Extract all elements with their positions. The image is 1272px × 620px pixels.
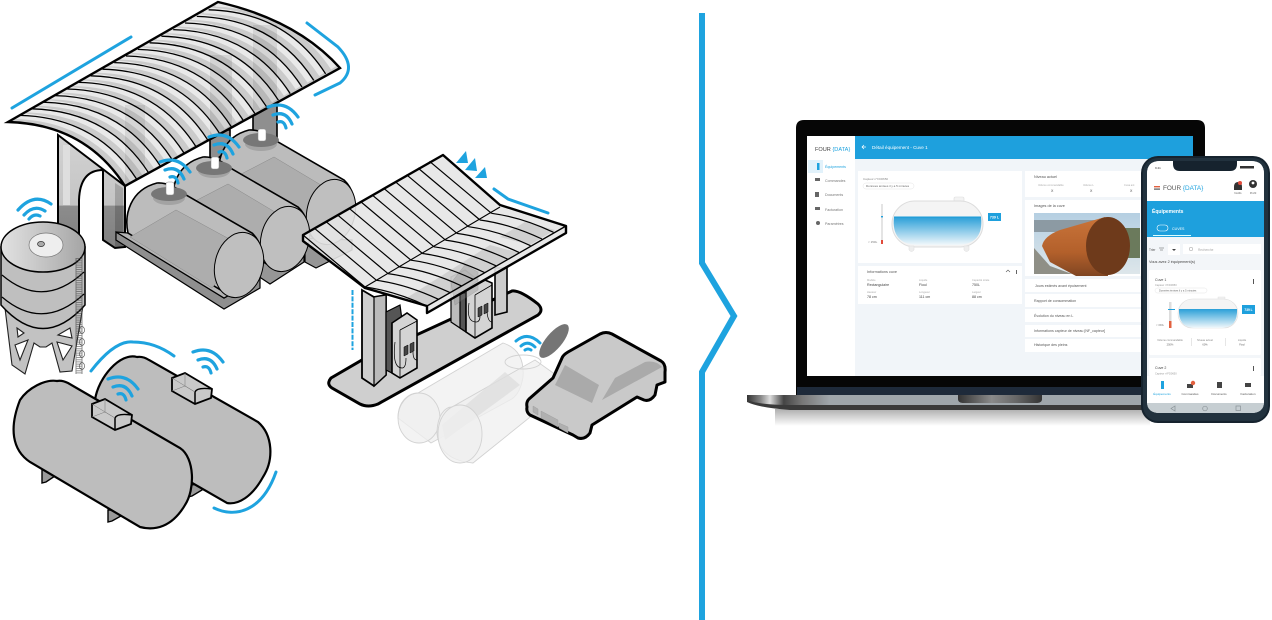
laptop (747, 120, 1206, 426)
equipment card 1: 250% (1167, 342, 1174, 346)
tank info card: 111 cm (919, 295, 930, 299)
car (527, 332, 665, 438)
level label (988, 213, 1001, 221)
equipment card 2 (1149, 358, 1261, 376)
bottom navigation: Équipements (1153, 391, 1171, 396)
tank image card: Images de la cuve (1034, 204, 1065, 208)
tank supports (42, 468, 202, 522)
curved ribbed roof (8, 2, 340, 195)
status bar: 9:41 (1155, 166, 1161, 170)
current level card: Volume commandable (1038, 183, 1064, 187)
blue section header: Équipements (1152, 207, 1184, 215)
blue triangles (456, 151, 487, 178)
phone level label: 739 L (1244, 308, 1253, 312)
equipment card 1: Niveau actuel (1197, 338, 1213, 342)
tank photo (1034, 213, 1140, 276)
blue motion line: roof top (12, 37, 131, 108)
equipment card 1: Liquide (1238, 338, 1247, 342)
pump right (451, 270, 492, 338)
equipment card 1: Cuve 1 (1155, 278, 1166, 282)
laptop screen (807, 136, 1193, 376)
canopy pillars (58, 105, 277, 248)
laptop lid (796, 120, 1205, 396)
header bar: Détail équipement - Cuve 1 (872, 145, 928, 150)
tank info card: Fioul (919, 283, 927, 287)
three storage tanks (127, 130, 362, 303)
current level card: X (1051, 189, 1054, 193)
blue section header (1147, 201, 1264, 237)
front sensor box (92, 399, 132, 430)
tank info card: Hauteur (867, 290, 876, 294)
blue section header: CUVES (1172, 227, 1185, 231)
tank info card (858, 266, 1022, 304)
station roof (303, 155, 566, 313)
silo lid (29, 233, 63, 257)
silo (1, 199, 85, 374)
header bar (855, 136, 1193, 159)
tank figure (892, 197, 983, 252)
wifi signals: twin tanks (108, 350, 223, 400)
tank 3 (219, 130, 362, 250)
level label: 739 L (990, 216, 1000, 220)
accordion rows: Évolution du niveau en L (1034, 313, 1073, 318)
tank chart card: Données émises il y a 5 minutes (866, 184, 910, 188)
status bar (1155, 166, 1254, 170)
sidebar: Paramètres (825, 222, 844, 226)
tank info card: Modèle (867, 278, 876, 282)
bottom navigation: Facturation (1240, 392, 1256, 396)
blue dashed line (352, 290, 354, 350)
equipment card 2: Capteur n°FD0650 (1155, 372, 1177, 376)
sidebar (807, 136, 855, 376)
tank 1 (127, 183, 270, 303)
equipment card 1: 60% (1202, 342, 1208, 346)
blue divider chevron (702, 13, 734, 620)
sidebar: Équipements (825, 164, 846, 169)
filter row: Recherche (1198, 248, 1214, 252)
equipment card 2: Cuve 2 (1155, 366, 1166, 370)
current level card (1025, 171, 1193, 197)
current level card: X (1130, 189, 1133, 193)
pump rear pillar (495, 268, 507, 315)
equipment card 1: Données émises il y a 5 minutes (1159, 289, 1197, 293)
blue motion arc: top (91, 342, 174, 371)
back tank (95, 356, 270, 503)
current level card: Volume L (1083, 183, 1094, 187)
silo body (1, 247, 85, 328)
sidebar: Commandes (825, 179, 846, 183)
accordion rows: Jours estimés avant épuisement (1035, 284, 1087, 288)
tank image card (1025, 200, 1193, 276)
wifi signal: silo (18, 199, 51, 219)
android nav bar (1147, 402, 1264, 413)
silo legs (4, 300, 84, 374)
sidebar: FOUR {DATA} (815, 147, 850, 153)
filter row (1149, 244, 1261, 255)
blue motion arc: bottom (214, 472, 276, 512)
gas station (303, 151, 665, 463)
accordion rows: Historique des pleins (1034, 343, 1068, 347)
equipment count: Vous avez 2 équipement(s) (1149, 260, 1196, 264)
current level card: X (1090, 189, 1093, 193)
equipment card 1: < 150L (1156, 323, 1165, 327)
silo top (1, 222, 85, 272)
laptop base (747, 395, 1206, 410)
laptop shadow (775, 409, 1150, 426)
tank chart card: Capteur n°FD0650 (863, 177, 888, 181)
phone frame (1141, 156, 1270, 423)
pump left (386, 305, 417, 378)
bottom navigation: Documents (1211, 392, 1227, 396)
tank info card: Largeur (972, 290, 981, 294)
tank info card: 88 cm (972, 295, 982, 299)
front tank (14, 381, 192, 528)
equipment card 1: Capteur n°FD0650 (1155, 283, 1177, 287)
equipment card 1 (1149, 270, 1261, 355)
accordion rows: Informations capteur de niveau [NF_capteur] (1034, 329, 1105, 333)
tank 2 (173, 157, 316, 277)
silo bands (2, 272, 84, 314)
blue motion line: station roof (494, 189, 548, 213)
blue motion line: roof right (307, 23, 349, 95)
app header: FOUR {DATA} (1163, 185, 1204, 192)
phone tank figure (1178, 297, 1238, 328)
level sensors (151, 129, 279, 205)
laptop notch (958, 395, 1042, 403)
sidebar: Documents (825, 193, 843, 197)
notifications icon: Notifs (1234, 191, 1242, 195)
notch (1173, 161, 1237, 171)
silo ladder (76, 255, 84, 374)
app header (1147, 161, 1264, 201)
wifi signals: canopy tanks (160, 105, 298, 183)
profile icon: Profil (1250, 191, 1257, 195)
tank info card: 750L (972, 283, 980, 287)
current level card: Niveau actuel (1034, 175, 1057, 179)
tank chart card: < 150L (868, 240, 878, 244)
tank info card: Rectangulaire (867, 283, 889, 287)
tank bases (116, 232, 352, 309)
tank chart card (858, 171, 1022, 263)
accordion rows: Rapport de consommation (1034, 299, 1076, 303)
ghost underground tanks (398, 343, 570, 463)
phone screen (1147, 161, 1264, 413)
lower twin tanks (14, 342, 276, 528)
back sensor box (172, 373, 212, 404)
canopy storage site (8, 2, 362, 309)
smartphone (1141, 156, 1270, 423)
platform (329, 291, 541, 406)
tank info card: 78 cm (867, 295, 877, 299)
current level card: Cuva ant (1124, 183, 1135, 187)
tank info card: Informations cuve (867, 270, 897, 274)
accordion rows (1025, 279, 1193, 352)
filter row: Trier (1149, 248, 1156, 252)
equipment card 1: Volume commandable (1157, 338, 1183, 342)
bottom navigation (1147, 376, 1264, 403)
tank info card: Liquide (919, 278, 928, 282)
bottom navigation: Commandes (1181, 392, 1199, 396)
equipment card 1: Fioul (1239, 342, 1245, 346)
sidebar: Facturation (825, 208, 843, 212)
front pillar (362, 290, 386, 386)
fuel nozzle reader (534, 320, 574, 362)
tank info card: Capacité totale (972, 278, 990, 282)
tank info card: Longueur (919, 290, 930, 294)
wifi signal: station (516, 336, 540, 350)
